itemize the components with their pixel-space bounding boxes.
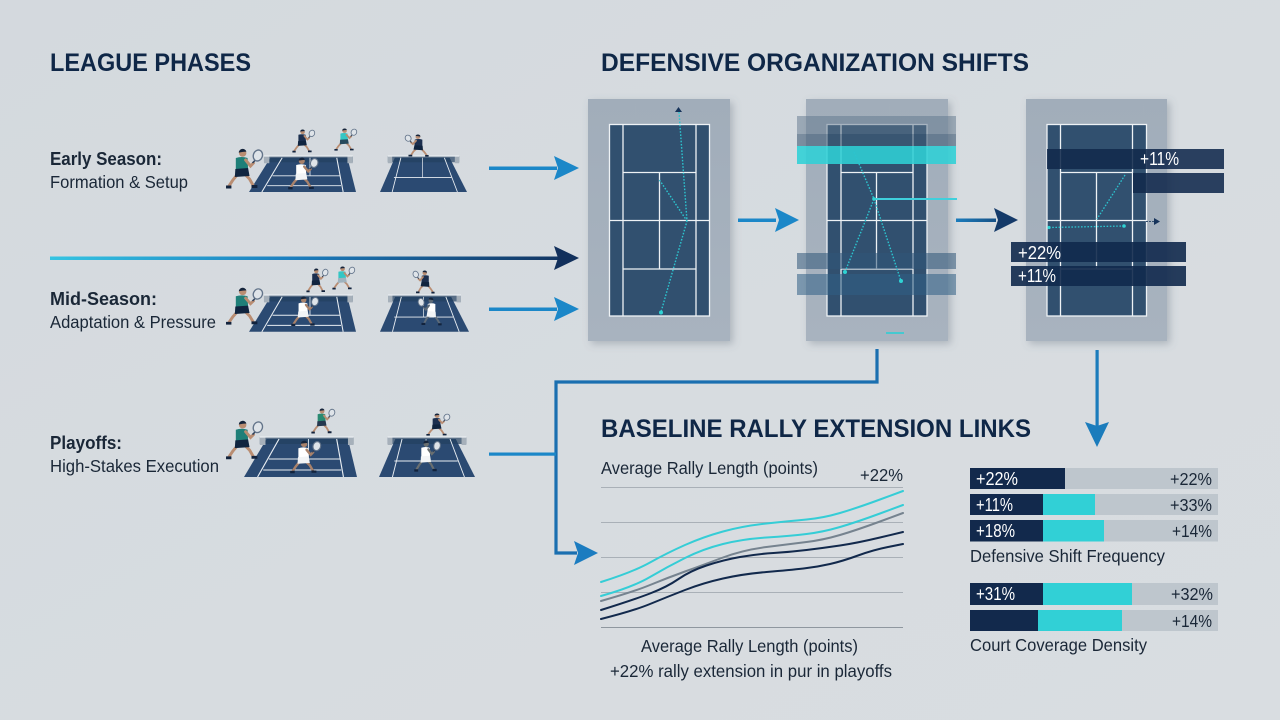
stat band lower: +22% bbox=[1011, 242, 1186, 263]
callout line bbox=[874, 198, 957, 200]
chart end value: +22% bbox=[860, 465, 903, 485]
direction marker bbox=[1146, 218, 1160, 225]
bar group label: Defensive Shift Frequency bbox=[970, 546, 1165, 566]
phase label: early season: Formation & Setup bbox=[50, 172, 188, 192]
shot dots bbox=[1047, 224, 1126, 229]
phase label: early season bbox=[50, 149, 188, 192]
bar row 3: +18% bbox=[976, 521, 1015, 541]
phase label: playoffs: High-Stakes Execution bbox=[50, 456, 219, 476]
bar row 2: +33% bbox=[1170, 495, 1212, 515]
bar row 3 bbox=[970, 520, 1218, 542]
phase label: playoffs bbox=[50, 433, 219, 476]
chart caption: Average Rally Length (points) bbox=[641, 636, 858, 656]
illustration: mid-season courts and players bbox=[226, 266, 469, 332]
phase label: mid-season: Mid-Season: bbox=[50, 289, 157, 309]
heading: defensive organization shifts: DEFENSIVE ORGANIZATION SHIFTS bbox=[601, 49, 1029, 77]
heading: baseline rally extension links: BASELINE RALLY EXTENSION LINKS bbox=[601, 415, 1031, 443]
bar row 2 bbox=[970, 610, 1218, 631]
arrow: panel 2 down to chart bbox=[489, 349, 877, 565]
bar group label: Court Coverage Density bbox=[970, 635, 1147, 655]
stat band lower: +11%: +11% bbox=[1018, 266, 1056, 286]
bar row 1 bbox=[970, 583, 1218, 605]
bar row 1 bbox=[970, 468, 1218, 489]
panel: court shift 1 bbox=[588, 99, 730, 341]
zone bands bbox=[797, 116, 956, 295]
bar row 3: +14% bbox=[1172, 521, 1212, 541]
stat band lower: +22%: +22% bbox=[1018, 243, 1061, 263]
chart title: Average Rally Length (points) bbox=[601, 458, 818, 478]
shot paths bbox=[660, 112, 687, 312]
bar row 1: +22% bbox=[976, 469, 1018, 489]
shot paths bbox=[1049, 175, 1125, 228]
bar row 2: +11% bbox=[976, 495, 1013, 515]
bar row 1: +31% bbox=[976, 584, 1015, 604]
chart caption: +22% rally extension in pur in playoffs bbox=[610, 661, 892, 681]
stat band upper: +11% bbox=[1047, 149, 1224, 169]
arrow: long league flow bbox=[50, 246, 579, 270]
arrowhead marker bbox=[675, 107, 682, 112]
illustration: early season courts and players bbox=[226, 128, 467, 192]
arrow: panel 3 down to bars bbox=[1085, 350, 1109, 447]
stat band upper: +11%: +11% bbox=[1140, 149, 1179, 169]
shot dots bbox=[843, 197, 903, 283]
court diagram bbox=[610, 124, 710, 316]
bar group: defensive shift frequency bbox=[970, 468, 1218, 566]
stat band lower: +11% bbox=[1011, 266, 1186, 286]
origin dot bbox=[659, 310, 663, 314]
bar group: court coverage density bbox=[970, 583, 1218, 655]
panel: court shift 3 bbox=[1011, 99, 1224, 341]
series lines bbox=[601, 491, 903, 619]
phase label: mid-season: Adaptation & Pressure bbox=[50, 312, 216, 332]
shot paths bbox=[845, 152, 901, 281]
arrow: panel 1 to panel 2 bbox=[738, 208, 799, 232]
court diagram bbox=[1047, 124, 1146, 316]
stat band upper blank bbox=[1133, 173, 1224, 193]
illustration: playoffs courts and players bbox=[226, 408, 475, 477]
phase label: early season: Early Season: bbox=[50, 149, 162, 169]
bar row 2: +14% bbox=[1172, 611, 1212, 631]
bar row 1: +22% bbox=[1170, 469, 1212, 489]
bar row 2 bbox=[970, 494, 1218, 515]
phase label: playoffs: Playoffs: bbox=[50, 433, 122, 453]
small marker bbox=[886, 332, 904, 334]
court diagram bbox=[827, 124, 927, 316]
line chart: average rally length bbox=[601, 458, 903, 628]
heading: league phases: LEAGUE PHASES bbox=[50, 49, 251, 77]
arrow: panel 2 to panel 3 bbox=[956, 208, 1018, 232]
arrow: mid-season to panel bbox=[489, 297, 579, 321]
bar row 1: +32% bbox=[1171, 584, 1213, 604]
panel: court shift 2 bbox=[797, 99, 957, 341]
chart caption bbox=[610, 636, 892, 681]
arrow: early season to panel bbox=[489, 156, 579, 180]
phase label: mid-season bbox=[50, 289, 216, 332]
